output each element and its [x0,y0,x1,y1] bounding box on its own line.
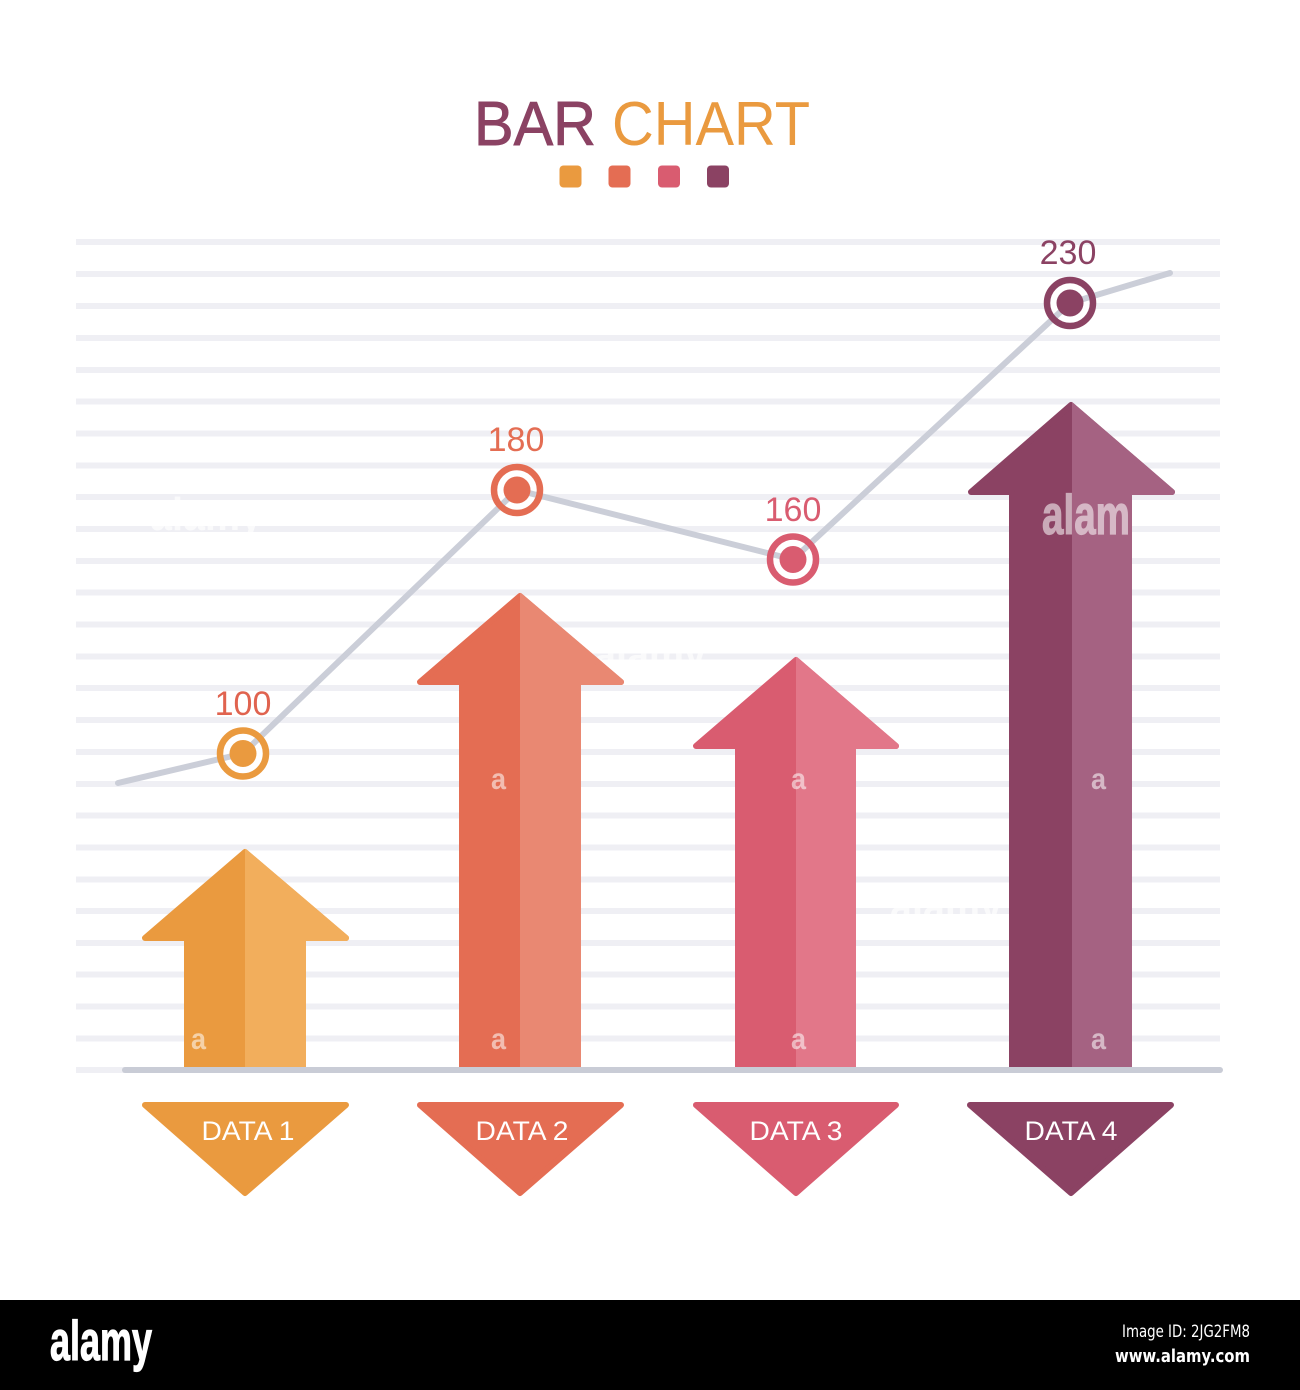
watermarks on the arrows: a [491,1023,506,1056]
watermarks on the arrows: a [491,763,506,796]
title: CHART [612,90,810,159]
category label: data 2 [420,1105,621,1193]
footer bar [0,1300,1300,1390]
title: BAR [474,90,596,159]
baseline axis [125,1067,1220,1073]
trend line [118,273,1170,783]
website: www.alamy.com [1115,1346,1250,1367]
marker: 100 [215,685,271,776]
marker: 180 [488,421,544,513]
arrow bar: data 3 [696,660,896,1067]
category label: data 4 [970,1105,1171,1193]
marker: 230 [1040,234,1096,326]
marker: 160 [765,491,821,582]
title [474,90,810,159]
faint watermarks on the background: alamy [150,488,262,540]
arrow bar: data 4 [971,405,1172,1067]
watermarks on the arrows: a [1091,763,1106,796]
arrow bar: data 1 [145,852,346,1067]
footer logo: alamy [50,1309,152,1372]
category label: data 1: DATA 1 [202,1116,294,1146]
watermarks on the arrows: a [1091,1023,1106,1056]
watermarks on the arrows: a [791,763,806,796]
marker: 180: 180 [488,421,544,459]
image id: Image ID: 2JG2FM8 [1122,1322,1250,1342]
watermarks on the arrows: alam [1042,483,1130,546]
marker: 230: 230 [1040,234,1096,272]
category label: data 3: DATA 3 [750,1116,842,1146]
category label: data 1 [145,1105,346,1193]
category label: data 4: DATA 4 [1024,1116,1118,1146]
legend colour squares [560,166,729,188]
category label: data 3 [696,1105,896,1193]
category label: data 2: DATA 2 [476,1116,568,1146]
watermarks on the arrows: a [791,1023,806,1056]
faint watermarks on the background [150,488,1002,932]
faint watermarks on the background: alamy [890,880,1002,932]
watermarks on the arrows [191,483,1130,1056]
arrow bar: data 2 [420,596,621,1067]
marker: 160: 160 [765,491,821,529]
marker: 100: 100 [215,685,271,723]
watermarks on the arrows: a [191,1023,206,1056]
faint watermarks on the background: alamy [594,628,706,680]
